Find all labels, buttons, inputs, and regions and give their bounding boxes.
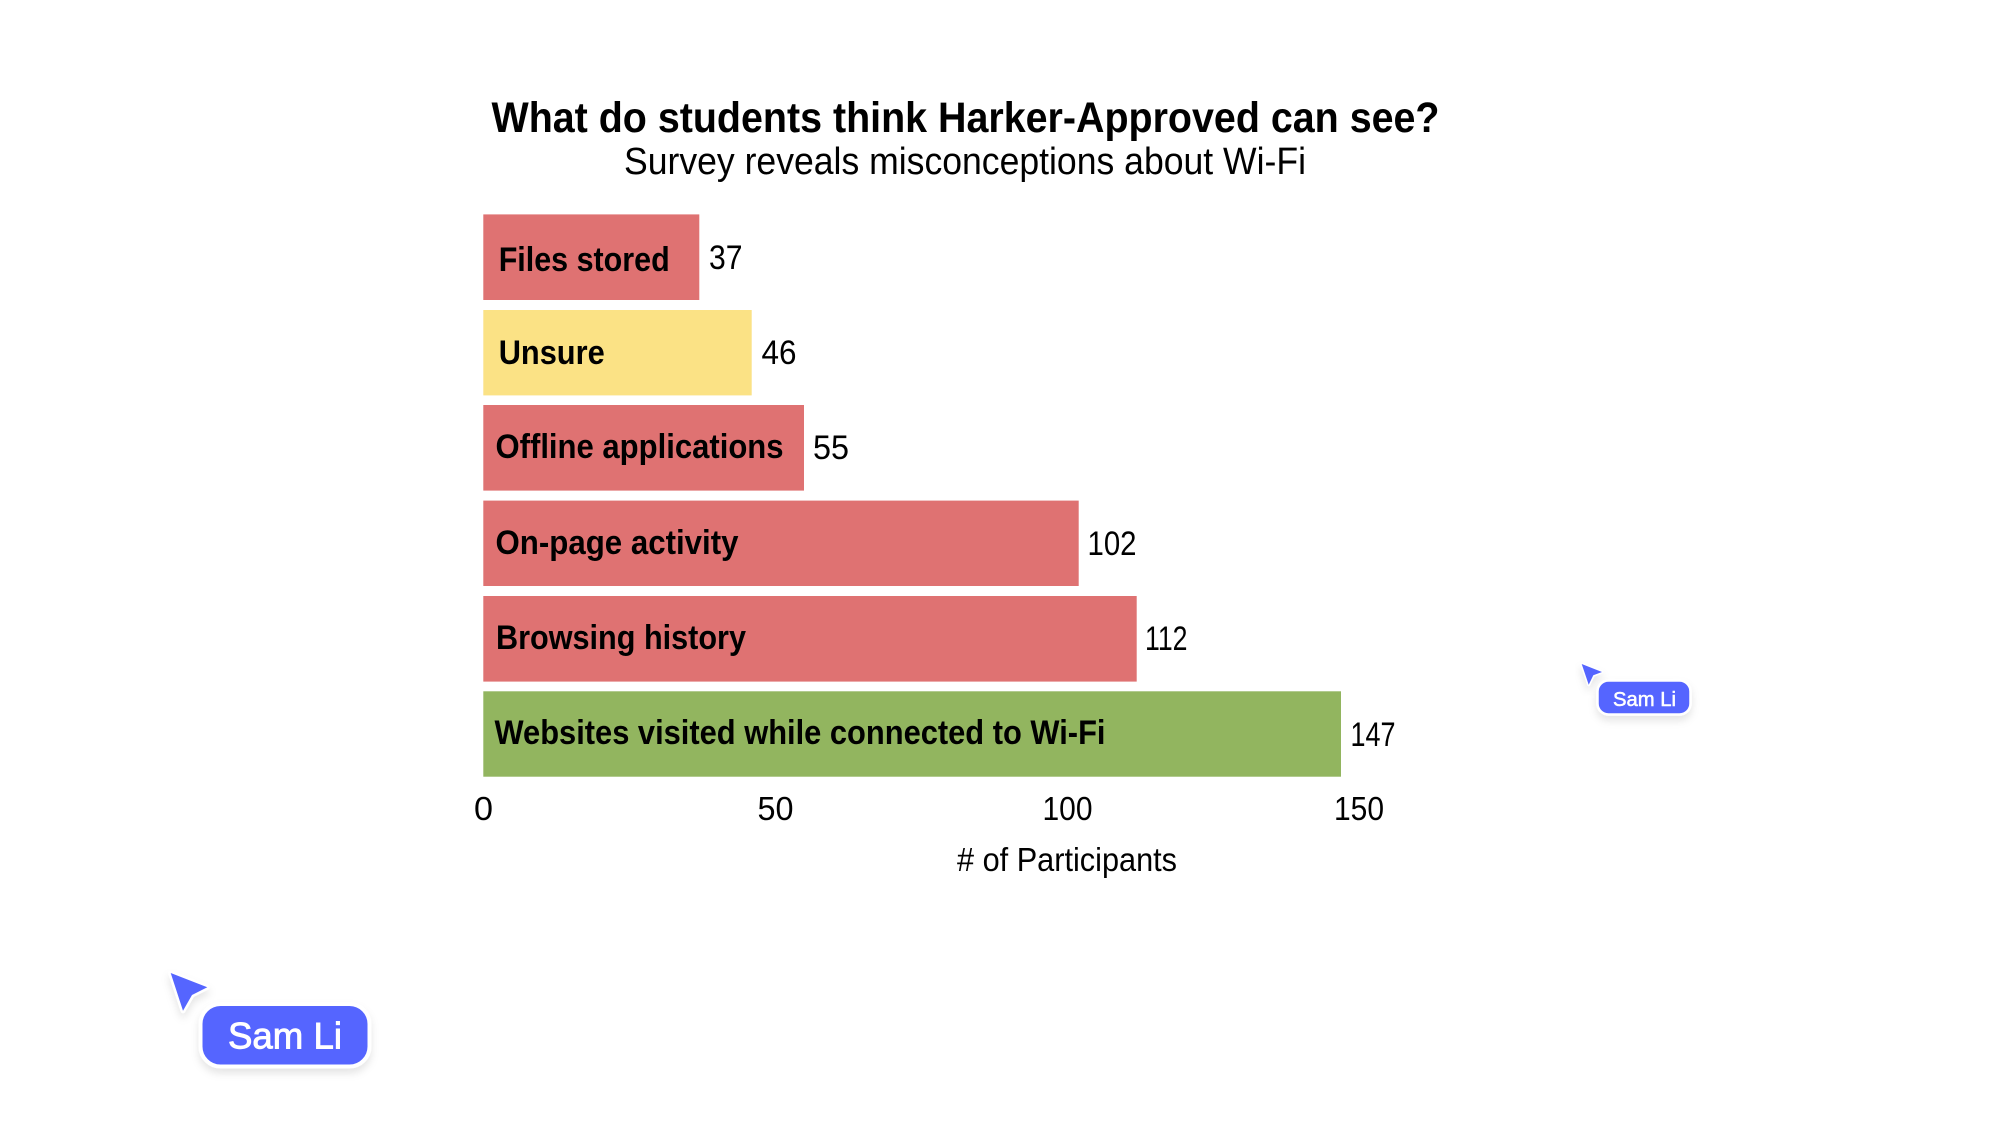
small name tag: Sam Li [1613, 689, 1676, 711]
bar: Offline applications: 55 [813, 429, 849, 467]
bar: On-page activity [483, 501, 1136, 586]
bar: On-page activity: On-page activity [496, 524, 739, 562]
subtitle: Survey reveals misconceptions about Wi-Fi [624, 141, 1306, 183]
bar: Unsure [483, 310, 796, 395]
bar: Files stored: Files stored [499, 241, 670, 279]
x axis tick labels: 150 [1334, 790, 1384, 827]
icon: small cursor arrow [1582, 664, 1602, 685]
bar: Websites visited while connected to Wi-Fi [483, 691, 1396, 777]
title: What do students think Harker-Approved can see? [492, 94, 1440, 142]
cursor: small Sam Li [1582, 664, 1690, 714]
bar: Browsing history [483, 596, 1188, 682]
cursor: large Sam Li [171, 973, 370, 1066]
bar: Unsure: 46 [762, 334, 796, 372]
bar: Browsing history: 112 [1145, 620, 1188, 658]
bar: Offline applications [483, 405, 849, 491]
bar: Websites visited while connected to Wi-Fi: 147 [1350, 716, 1396, 754]
large name tag [200, 1004, 370, 1066]
bar: Files stored: 37 [709, 239, 742, 277]
x axis title: # of Participants [957, 841, 1177, 878]
x axis tick labels: 0 [474, 790, 493, 827]
x axis tick labels: 100 [1042, 790, 1092, 827]
bar: Unsure: Unsure [499, 334, 605, 372]
bar: Browsing history: Browsing history [496, 619, 746, 657]
x axis tick labels [474, 790, 1384, 827]
bar: Files stored [483, 214, 742, 300]
x axis tick labels: 50 [758, 790, 794, 827]
large name tag: Sam Li [228, 1016, 342, 1056]
bar: Offline applications: Offline applications [496, 428, 784, 466]
bar: On-page activity: 102 [1088, 525, 1136, 563]
bar: Websites visited while connected to Wi-Fi: Websites visited while connected to Wi-Fi [494, 714, 1106, 752]
bar chart [474, 214, 1396, 878]
icon: large cursor arrow [171, 973, 207, 1011]
